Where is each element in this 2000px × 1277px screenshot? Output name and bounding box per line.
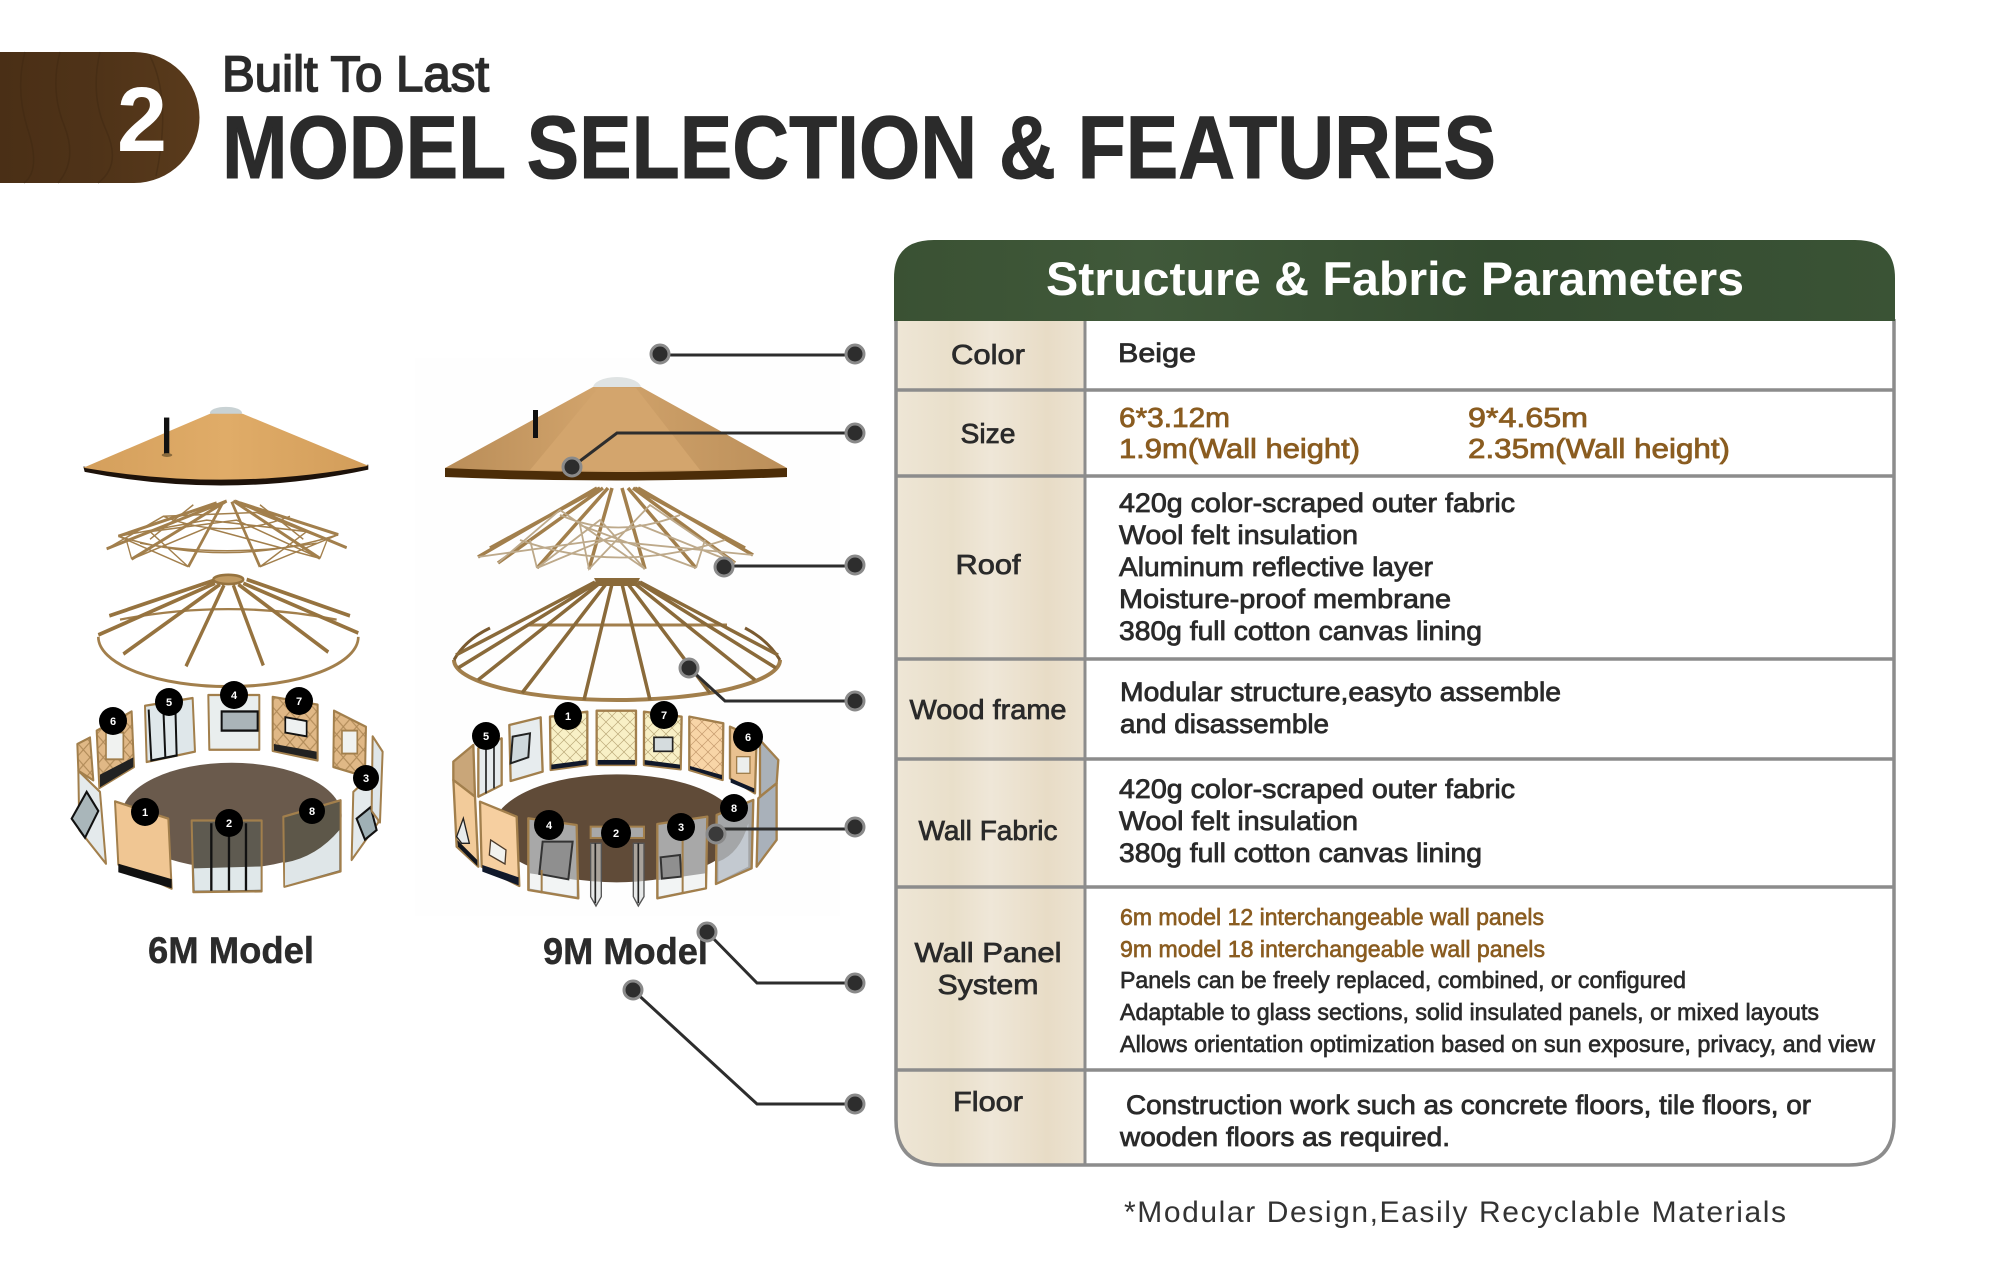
row: wall panel system: Adaptable to glass sections, solid insulated panels, or mixed layouts	[1120, 999, 1819, 1025]
main title: MODEL SELECTION & FEATURES	[222, 97, 1496, 197]
row: wall panel system: Allows orientation optimization based on sun exposure, privacy, and view	[1120, 1031, 1875, 1057]
6M floor	[122, 763, 342, 868]
row: roof: Wool felt insulation	[1119, 520, 1358, 550]
row: wall panel system: Panels can be freely replaced, combined, or configured	[1120, 967, 1686, 993]
6M panel number markers: 4	[231, 690, 238, 702]
row: size: 2.35m(Wall height)	[1468, 433, 1730, 464]
row: size	[960, 402, 1730, 464]
row: roof: Aluminum reflective layer	[1119, 552, 1433, 582]
9M panel number markers	[472, 701, 763, 848]
footnote: *Modular Design,Easily Recyclable Materials	[1124, 1196, 1786, 1229]
6M roof	[83, 407, 368, 486]
9M panel number markers: 6	[745, 732, 751, 744]
row: wall fabric: 380g full cotton canvas lining	[1119, 838, 1482, 868]
table header	[894, 240, 1895, 321]
row: floor: Construction work such as concrete floors, tile floors, or	[1126, 1090, 1811, 1120]
row: wall fabric	[918, 774, 1515, 868]
6M panel number markers	[99, 681, 379, 837]
6M panel number markers: 1	[142, 807, 148, 819]
callout leader lines	[563, 345, 864, 1113]
leader: roof	[715, 556, 864, 576]
row: floor: Floor	[953, 1086, 1023, 1117]
leader: wood frame	[680, 659, 864, 710]
9M panel number markers: 3	[678, 822, 684, 834]
leader: size	[563, 424, 864, 476]
row: size: 9*4.65m	[1468, 402, 1588, 433]
parameters table	[894, 240, 1895, 1165]
9M roof lattice	[478, 488, 753, 569]
exploded diagram: 6M model	[72, 407, 383, 892]
row: wood frame: Wood frame	[910, 694, 1066, 725]
row: wall fabric: Wall Fabric	[918, 815, 1058, 846]
row: size: Size	[960, 418, 1016, 449]
row: floor	[953, 1086, 1811, 1152]
9M wall panels	[453, 711, 778, 906]
exploded diagram: 9M model	[415, 358, 840, 916]
row: floor: wooden floors as required.	[1119, 1122, 1450, 1152]
6M panel number markers: 3	[363, 773, 369, 785]
section number badge: 2	[117, 69, 167, 171]
6M panel number markers: 7	[296, 696, 302, 708]
6M panel number markers: 8	[309, 806, 315, 818]
6M model label: 6M Model	[148, 930, 314, 971]
6M wall panels	[72, 695, 383, 892]
subtitle: Built To Last	[222, 46, 489, 102]
9M floor	[493, 774, 740, 882]
9M roof	[445, 377, 787, 480]
row: roof: 380g full cotton canvas lining	[1119, 616, 1482, 646]
6M roof lattice	[107, 501, 347, 567]
row: color	[951, 338, 1196, 370]
6M panel number markers: 6	[110, 716, 116, 728]
row: color: Color	[951, 339, 1025, 370]
9M wood frame	[454, 578, 780, 700]
row: color: Beige	[1118, 338, 1196, 368]
table header: Structure & Fabric Parameters	[1046, 252, 1744, 305]
row: size: 1.9m(Wall height)	[1119, 433, 1360, 464]
row: roof: 420g color-scraped outer fabric	[1119, 488, 1515, 518]
leader: floor	[624, 981, 864, 1113]
9M model label: 9M Model	[543, 931, 708, 972]
row: wood frame: Modular structure,easyto assemble	[1120, 677, 1561, 707]
row: wall fabric: Wool felt insulation	[1119, 806, 1358, 836]
9M panel number markers: 7	[661, 710, 667, 722]
9M panel number markers: 2	[613, 828, 619, 840]
table body frame	[896, 319, 1894, 1165]
6M panel number markers: 2	[226, 818, 232, 830]
row: wall panel system: Wall Panel	[914, 937, 1062, 968]
row: wall panel system: 9m model 18 interchangeable wall panels	[1120, 936, 1545, 962]
leader: color	[651, 345, 864, 363]
row: wood frame	[910, 677, 1561, 739]
row: wall panel system	[914, 904, 1875, 1057]
row: wall panel system: System	[938, 969, 1038, 1000]
6M panel number markers: 5	[166, 697, 172, 709]
row: roof	[956, 488, 1515, 646]
leader: wall fabric	[707, 818, 864, 843]
row: roof: Moisture-proof membrane	[1119, 584, 1451, 614]
row: wall panel system: 6m model 12 interchangeable wall panels	[1120, 904, 1544, 930]
row: roof: Roof	[956, 549, 1021, 580]
9M panel number markers: 5	[483, 731, 489, 743]
9M panel number markers: 1	[565, 711, 571, 723]
section number badge	[0, 52, 200, 183]
row: size: 6*3.12m	[1119, 402, 1230, 433]
row: wall fabric: 420g color-scraped outer fabric	[1119, 774, 1515, 804]
9M panel number markers: 8	[731, 803, 737, 815]
row: wood frame: and disassemble	[1120, 709, 1329, 739]
9M panel number markers: 4	[546, 820, 553, 832]
leader: wall panel system	[698, 923, 864, 992]
6M wood frame	[98, 575, 358, 687]
